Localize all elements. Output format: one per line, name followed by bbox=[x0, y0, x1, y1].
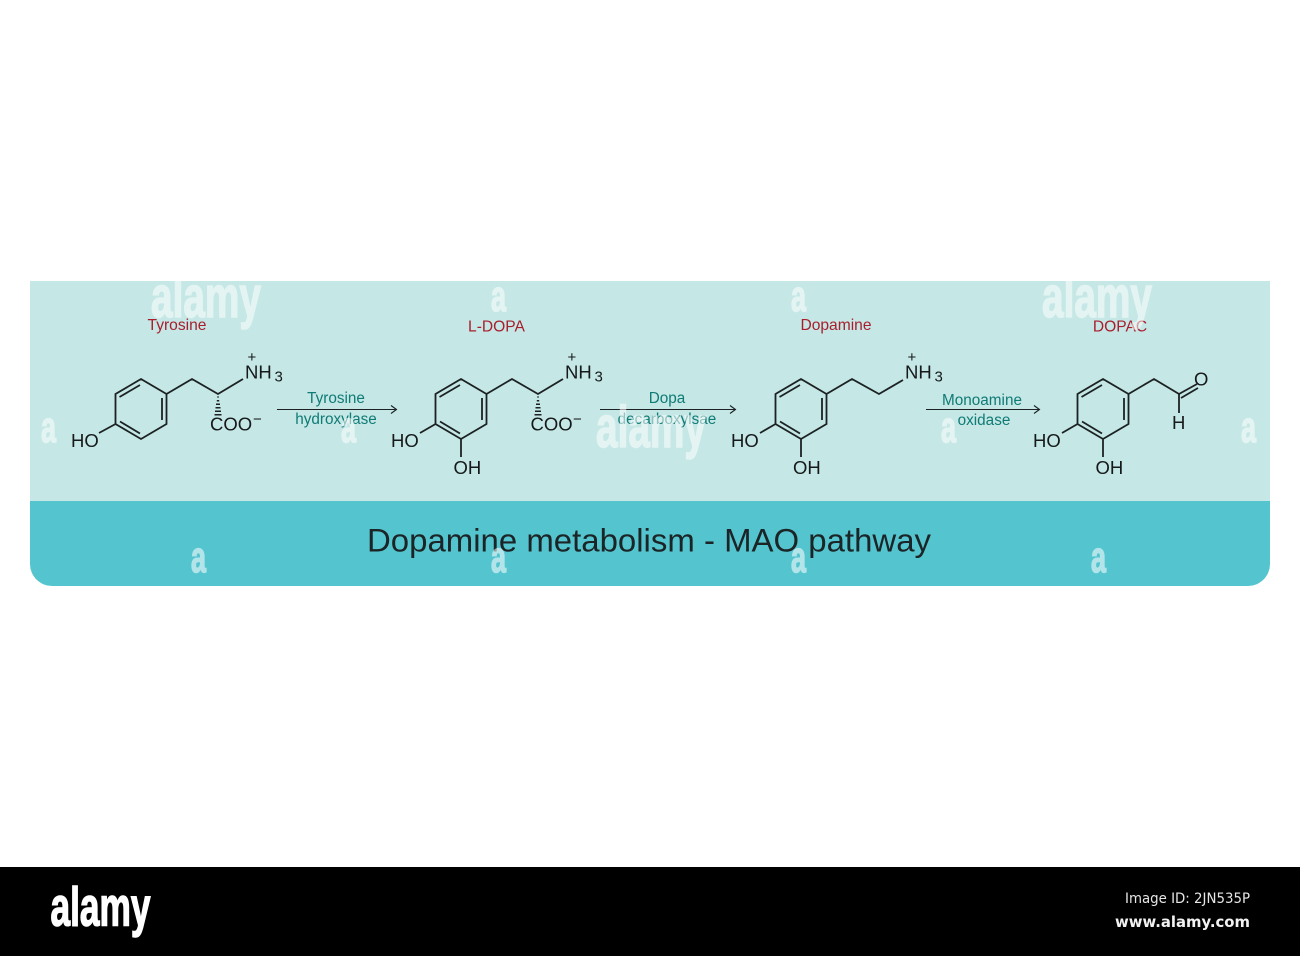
watermarks: a bbox=[941, 403, 956, 452]
watermarks: alamy bbox=[151, 265, 261, 330]
arrow: monoamine oxidase: oxidase bbox=[958, 412, 1010, 429]
molecule: Tyrosine: COO bbox=[210, 414, 252, 434]
molecule: Dopamine bbox=[731, 349, 943, 478]
molecule: Tyrosine bbox=[71, 349, 283, 451]
molecule: Dopamine: HO bbox=[731, 430, 759, 451]
watermarks: a bbox=[491, 272, 506, 321]
arrow: monoamine oxidase bbox=[926, 392, 1040, 429]
watermarks: a bbox=[191, 533, 206, 582]
title: Dopamine metabolism - MAO pathway bbox=[367, 522, 932, 558]
watermarks: a bbox=[1091, 533, 1106, 582]
molecule: DOPAC: O bbox=[1194, 368, 1208, 390]
footer bar bbox=[0, 867, 1300, 956]
footer logo: alamy bbox=[50, 876, 151, 938]
arrow: tyrosine hydroxylase bbox=[277, 390, 396, 428]
compound label: DOPAC: DOPAC bbox=[1093, 318, 1147, 336]
arrow: tyrosine hydroxylase: hydroxylase bbox=[295, 411, 377, 428]
molecule: Dopamine: NH bbox=[905, 362, 932, 382]
molecule: DOPAC: H bbox=[1172, 412, 1185, 433]
watermarks: a bbox=[491, 533, 506, 582]
watermarks bbox=[41, 265, 1256, 582]
image id: Image ID: 2JN535P bbox=[1125, 891, 1250, 907]
watermarks: alamy bbox=[1042, 265, 1152, 330]
arrow: dopa decarboxylase: Dopa bbox=[649, 390, 686, 407]
molecule: Dopamine: OH bbox=[793, 457, 821, 478]
watermarks: a bbox=[41, 403, 56, 452]
molecule: L-DOPA: NH bbox=[565, 362, 592, 382]
molecule: L-DOPA: HO bbox=[391, 430, 419, 451]
molecule: DOPAC bbox=[1033, 368, 1208, 478]
molecule: Tyrosine: − bbox=[253, 411, 262, 428]
compound label: L-DOPA: L-DOPA bbox=[468, 318, 526, 336]
title band bbox=[30, 501, 1270, 586]
watermarks: a bbox=[791, 533, 806, 582]
arrow: monoamine oxidase: Monoamine bbox=[942, 392, 1022, 409]
molecule: L-DOPA: 3 bbox=[594, 368, 603, 386]
compound label: Tyrosine: Tyrosine bbox=[148, 317, 206, 334]
molecule: L-DOPA bbox=[391, 349, 603, 478]
molecule: L-DOPA: + bbox=[568, 349, 576, 366]
molecule: L-DOPA: OH bbox=[454, 457, 481, 478]
molecule: Tyrosine: HO bbox=[71, 430, 99, 451]
molecule: DOPAC: OH bbox=[1096, 457, 1123, 478]
watermarks: a bbox=[791, 272, 806, 321]
watermarks: alamy bbox=[596, 395, 706, 460]
molecule: Tyrosine: + bbox=[248, 349, 256, 366]
arrow: dopa decarboxylase bbox=[600, 390, 736, 428]
molecule: Dopamine: 3 bbox=[934, 368, 943, 386]
molecule: Tyrosine: 3 bbox=[274, 368, 283, 386]
molecule: L-DOPA: − bbox=[573, 411, 582, 428]
molecule: Tyrosine: NH bbox=[245, 362, 272, 382]
website: www.alamy.com bbox=[1115, 913, 1250, 931]
molecule: DOPAC: HO bbox=[1033, 430, 1061, 451]
watermarks: a bbox=[1241, 403, 1256, 452]
panel: pathway background bbox=[30, 281, 1270, 501]
arrow: dopa decarboxylase: decarboxylsae bbox=[618, 411, 716, 428]
molecule: Dopamine: + bbox=[908, 349, 916, 366]
watermarks: a bbox=[341, 403, 356, 452]
compound label: Dopamine: Dopamine bbox=[800, 317, 872, 334]
arrow: tyrosine hydroxylase: Tyrosine bbox=[307, 390, 365, 407]
molecule: L-DOPA: COO bbox=[530, 414, 573, 434]
